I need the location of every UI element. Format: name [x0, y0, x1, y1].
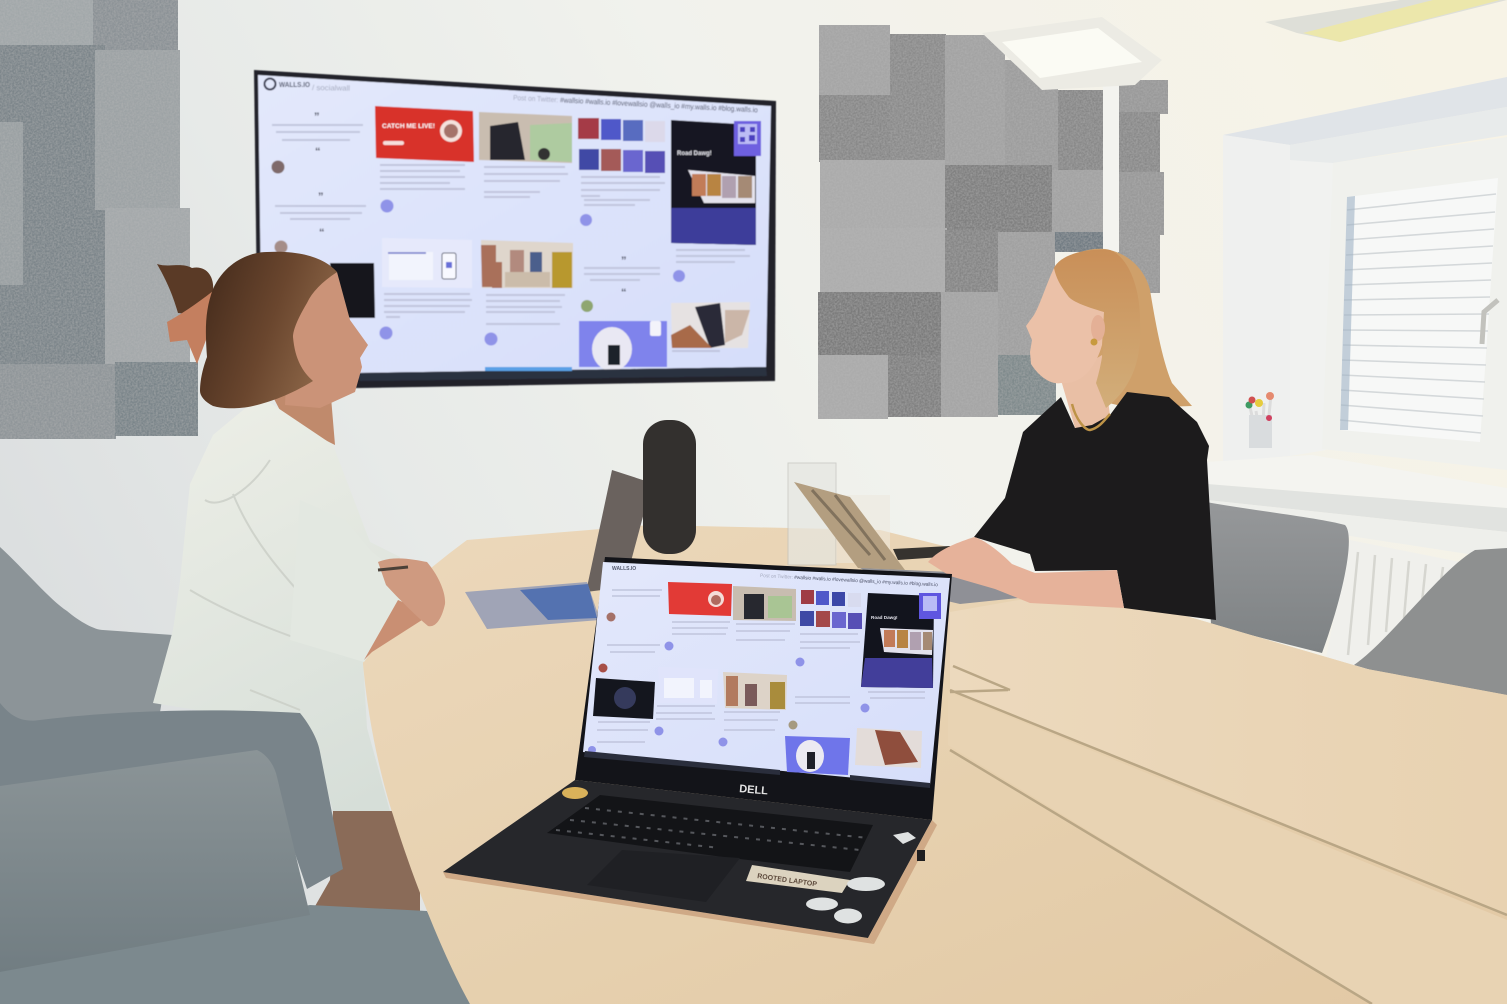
hair back	[1054, 249, 1192, 408]
laptop hashtags: Post on Twitter: #wallsio #walls.io #lovewallsio @walls_io #my.walls.io #blog.walls.io	[760, 573, 938, 588]
card: dog	[579, 321, 667, 371]
card: catch me live: CATCH ME LIVE!	[382, 123, 435, 130]
face	[285, 272, 368, 408]
quote marks: “	[319, 227, 324, 239]
laptop card: video	[593, 678, 655, 719]
earring	[1090, 338, 1098, 346]
table seams	[950, 666, 1507, 1004]
front chair seat	[0, 905, 470, 1004]
quote marks: ”	[621, 255, 626, 267]
person: right woman	[928, 249, 1216, 620]
chair: far right	[1354, 548, 1507, 710]
laptop card: group	[723, 672, 787, 710]
face	[1026, 268, 1104, 383]
claw clip	[167, 291, 213, 364]
hair bun	[157, 264, 213, 315]
side port	[917, 850, 925, 861]
left woman forearms and sleeve	[290, 500, 445, 662]
hair front	[1054, 250, 1140, 408]
hashtag header: Post on Twitter: #wallsio #walls.io #lovewallsio @walls_io #my.walls.io #blog.walls.io	[513, 93, 758, 114]
macbook keyboard	[520, 584, 597, 620]
conference speaker	[643, 420, 696, 554]
ceiling light	[1265, 0, 1507, 42]
logo	[264, 78, 350, 93]
quote marks: “	[621, 287, 626, 299]
bottom gold edge	[443, 872, 874, 944]
window and sill	[1207, 137, 1507, 680]
watch	[378, 567, 408, 570]
windowsill top	[1207, 455, 1507, 508]
laptop taskbar	[584, 751, 780, 775]
pen cup	[1246, 392, 1274, 448]
shirt folds	[190, 460, 345, 710]
hair	[200, 252, 337, 408]
quote marks: ”	[314, 111, 320, 123]
laptop logo: DELL	[739, 783, 769, 798]
back laptop	[794, 482, 1030, 604]
laptop card: selfies	[800, 590, 862, 629]
table	[363, 525, 1507, 1004]
taskbar	[357, 367, 767, 381]
chair: right back	[1206, 502, 1349, 653]
card: selfie grid	[578, 118, 665, 173]
card: road dawg	[671, 120, 761, 245]
window handle	[1482, 300, 1498, 344]
laptop card: van	[733, 586, 796, 621]
chair: left rear backrest	[0, 547, 173, 730]
necklace	[1072, 404, 1110, 430]
logo: WALLS.IO	[279, 82, 310, 89]
avatars	[272, 160, 685, 346]
back laptop base	[860, 568, 1030, 604]
sweater	[974, 392, 1216, 620]
card: group photo	[481, 240, 573, 288]
sleeve	[290, 500, 403, 662]
forearm	[364, 600, 425, 660]
card: van photo	[479, 112, 572, 163]
gold side	[868, 820, 937, 944]
radiator	[1326, 540, 1465, 680]
chair: left rear arm	[0, 703, 343, 889]
water glass	[788, 463, 890, 565]
laptop card: red	[668, 582, 732, 616]
hands and forearm	[928, 537, 1124, 608]
neck	[1061, 355, 1110, 428]
lower right table section	[948, 692, 1507, 1004]
blind cord strip	[1340, 196, 1355, 430]
card: phone photo	[671, 302, 750, 348]
wall display: social wall	[254, 70, 776, 388]
quote marks	[314, 111, 626, 299]
wall under sill	[1207, 500, 1507, 560]
front chair backrest	[0, 750, 310, 972]
keyboard	[547, 795, 873, 872]
dell laptop	[443, 557, 952, 944]
hands	[378, 558, 445, 626]
back laptop sticker lines	[812, 490, 885, 560]
laptop lid	[575, 557, 952, 820]
macbook lid	[586, 470, 652, 592]
window recess	[1223, 77, 1507, 462]
window frame	[1322, 137, 1507, 470]
laptop text lines	[597, 590, 925, 742]
laptop taskbar right	[850, 775, 930, 788]
shirt	[153, 396, 405, 811]
card: app mockup	[382, 238, 472, 288]
laptop logo on screen: WALLS.IO	[612, 566, 636, 572]
laptop base	[443, 780, 932, 938]
laptop display	[583, 562, 950, 785]
laptop card: dog	[785, 736, 850, 775]
logo: / socialwall	[312, 83, 350, 93]
blind	[1340, 178, 1498, 442]
label sticker: ROOTED LAPTOP	[757, 873, 818, 888]
macbook	[465, 470, 652, 629]
trousers	[310, 811, 420, 915]
right table section	[950, 598, 1507, 915]
person: left woman	[153, 252, 420, 915]
post text lines	[272, 125, 750, 351]
rainbow sticker	[562, 787, 588, 799]
taskbar accent	[485, 367, 572, 371]
trackpad	[587, 850, 740, 902]
back laptop lid	[794, 482, 905, 570]
floor lamp	[982, 17, 1162, 252]
neck	[272, 385, 335, 445]
display bezel	[254, 70, 776, 388]
laptop qr	[919, 593, 941, 619]
panel: right acoustic felt blocks	[818, 25, 1168, 419]
ear	[1091, 315, 1105, 341]
quote marks: “	[315, 146, 320, 158]
card: road dawg: Road Dawg!	[677, 151, 712, 157]
windowsill front	[1207, 484, 1507, 532]
card: catch me live	[375, 106, 474, 162]
phone on table	[893, 546, 955, 560]
laptop card: mockup	[658, 667, 718, 704]
small stickers	[806, 832, 916, 924]
label sticker	[746, 865, 850, 893]
laptop avatars	[588, 612, 870, 754]
panel: left acoustic felt blocks	[0, 0, 198, 439]
laptop card: road dawg: Road Dawg!	[871, 615, 898, 620]
display content	[258, 75, 771, 374]
qr code	[734, 121, 761, 156]
chair: front left	[0, 750, 470, 1004]
macbook base	[465, 582, 600, 629]
laptop card: road dawg	[861, 593, 941, 688]
card: dark video	[330, 263, 375, 318]
laptop card: hand photo	[855, 728, 922, 768]
quote marks: ”	[318, 191, 324, 203]
